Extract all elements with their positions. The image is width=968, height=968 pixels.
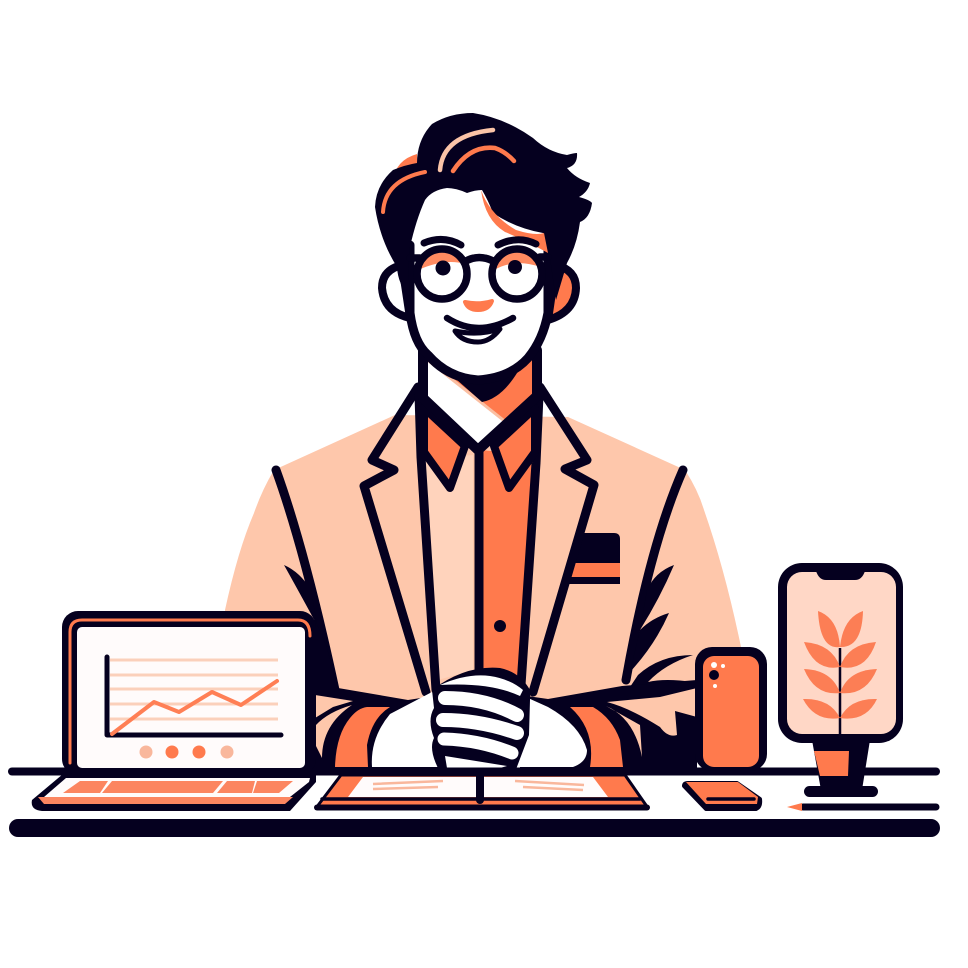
left inner jacket edge bbox=[419, 395, 436, 690]
shirt placket bbox=[480, 450, 535, 685]
collar highlight bbox=[430, 362, 507, 423]
stand orange panel bbox=[814, 751, 849, 776]
jacket silhouette bbox=[225, 415, 741, 720]
camera bbox=[709, 670, 719, 680]
head bbox=[375, 113, 592, 380]
right forearm dark bbox=[520, 680, 697, 772]
right pupil bbox=[508, 260, 522, 274]
arms and hands bbox=[305, 620, 697, 777]
pencil tip bbox=[787, 803, 802, 811]
chart bbox=[107, 657, 281, 758]
right sleeve fold bbox=[607, 688, 697, 736]
right lapel bbox=[533, 387, 594, 692]
person: jacket and shirt bbox=[225, 387, 741, 720]
mouth bbox=[447, 318, 513, 342]
left forearm dark bbox=[305, 620, 440, 772]
hair highlight orange bbox=[453, 148, 514, 171]
keyboard deck bbox=[44, 778, 310, 797]
tablet screen bbox=[787, 572, 896, 734]
stand bbox=[812, 740, 870, 790]
laptop screen bbox=[77, 627, 305, 768]
camera dots bbox=[711, 662, 725, 688]
book cover bbox=[316, 775, 648, 808]
right ear bbox=[548, 265, 576, 320]
face outline bbox=[410, 245, 548, 380]
right sleeve sliver bbox=[606, 706, 642, 757]
left collar bbox=[424, 408, 465, 488]
glasses bbox=[410, 249, 548, 299]
white collar bbox=[428, 362, 507, 447]
desk bottom bar bbox=[9, 819, 940, 837]
hair bbox=[375, 113, 592, 300]
book bbox=[316, 772, 648, 808]
keys bbox=[63, 781, 293, 793]
right hand bbox=[490, 698, 587, 767]
desk top line bbox=[12, 768, 936, 776]
left page bbox=[348, 777, 476, 797]
tablet frame bbox=[778, 563, 903, 743]
chart axes bbox=[107, 657, 281, 735]
left cuff bbox=[335, 707, 390, 767]
plant leaves bbox=[803, 611, 877, 719]
left sleeve sliver bbox=[316, 705, 352, 758]
base front strip bbox=[38, 797, 293, 804]
fingers bbox=[430, 668, 530, 777]
neck orange fill bbox=[428, 358, 535, 447]
shirt left panel bbox=[423, 455, 473, 680]
left lapel bbox=[364, 387, 426, 692]
left hand bbox=[372, 692, 470, 767]
shirt center line bbox=[474, 450, 484, 670]
tablet notch bbox=[816, 571, 865, 580]
stand base bbox=[804, 786, 878, 797]
right eyebrow bbox=[498, 240, 536, 245]
back of phone bbox=[695, 647, 767, 771]
left ear bbox=[382, 265, 410, 318]
right collar bbox=[494, 408, 535, 488]
laptop lid bbox=[62, 611, 316, 775]
eye tint right bbox=[494, 252, 540, 270]
face fill bbox=[410, 180, 548, 380]
chin shadow bbox=[440, 365, 520, 402]
left eyebrow bbox=[424, 239, 461, 245]
lid orange trim bbox=[70, 620, 310, 763]
left sleeve wedge bbox=[315, 695, 353, 718]
eye tint left bbox=[418, 252, 465, 270]
right inner jacket edge bbox=[521, 395, 539, 685]
text lines bbox=[373, 781, 584, 790]
grid lines bbox=[110, 660, 278, 719]
phone orange body bbox=[703, 656, 759, 767]
left sleeve line bbox=[276, 470, 335, 690]
pencil bbox=[787, 803, 936, 811]
neck and white collar bbox=[423, 350, 537, 450]
left pupil bbox=[436, 260, 450, 276]
tablet on stand bbox=[778, 563, 903, 797]
laptop base bbox=[32, 774, 316, 811]
phone slot bbox=[708, 797, 754, 801]
book bottom edge bbox=[317, 804, 647, 810]
laptop bbox=[32, 611, 316, 811]
hair highlight left bbox=[383, 172, 425, 212]
pocket bbox=[568, 533, 620, 584]
nose bbox=[465, 301, 492, 310]
right sleeve line bbox=[626, 470, 683, 680]
phone surface bbox=[686, 782, 758, 804]
neck outline bbox=[423, 350, 537, 450]
right cuff bbox=[570, 707, 623, 767]
left sleeve creases bbox=[284, 565, 317, 625]
pagination dots bbox=[140, 746, 234, 758]
orange hair shadow bbox=[393, 154, 418, 182]
hair highlight pale bbox=[440, 130, 493, 170]
shirt button bbox=[494, 620, 506, 632]
plant stem bbox=[839, 648, 841, 734]
book spine bbox=[476, 772, 484, 800]
page rule bbox=[322, 797, 640, 801]
right sleeve creases bbox=[628, 565, 693, 690]
small phone on desk bbox=[684, 782, 760, 809]
hair strip orange bbox=[481, 190, 548, 253]
right page bbox=[484, 777, 608, 797]
trend line bbox=[112, 681, 277, 734]
